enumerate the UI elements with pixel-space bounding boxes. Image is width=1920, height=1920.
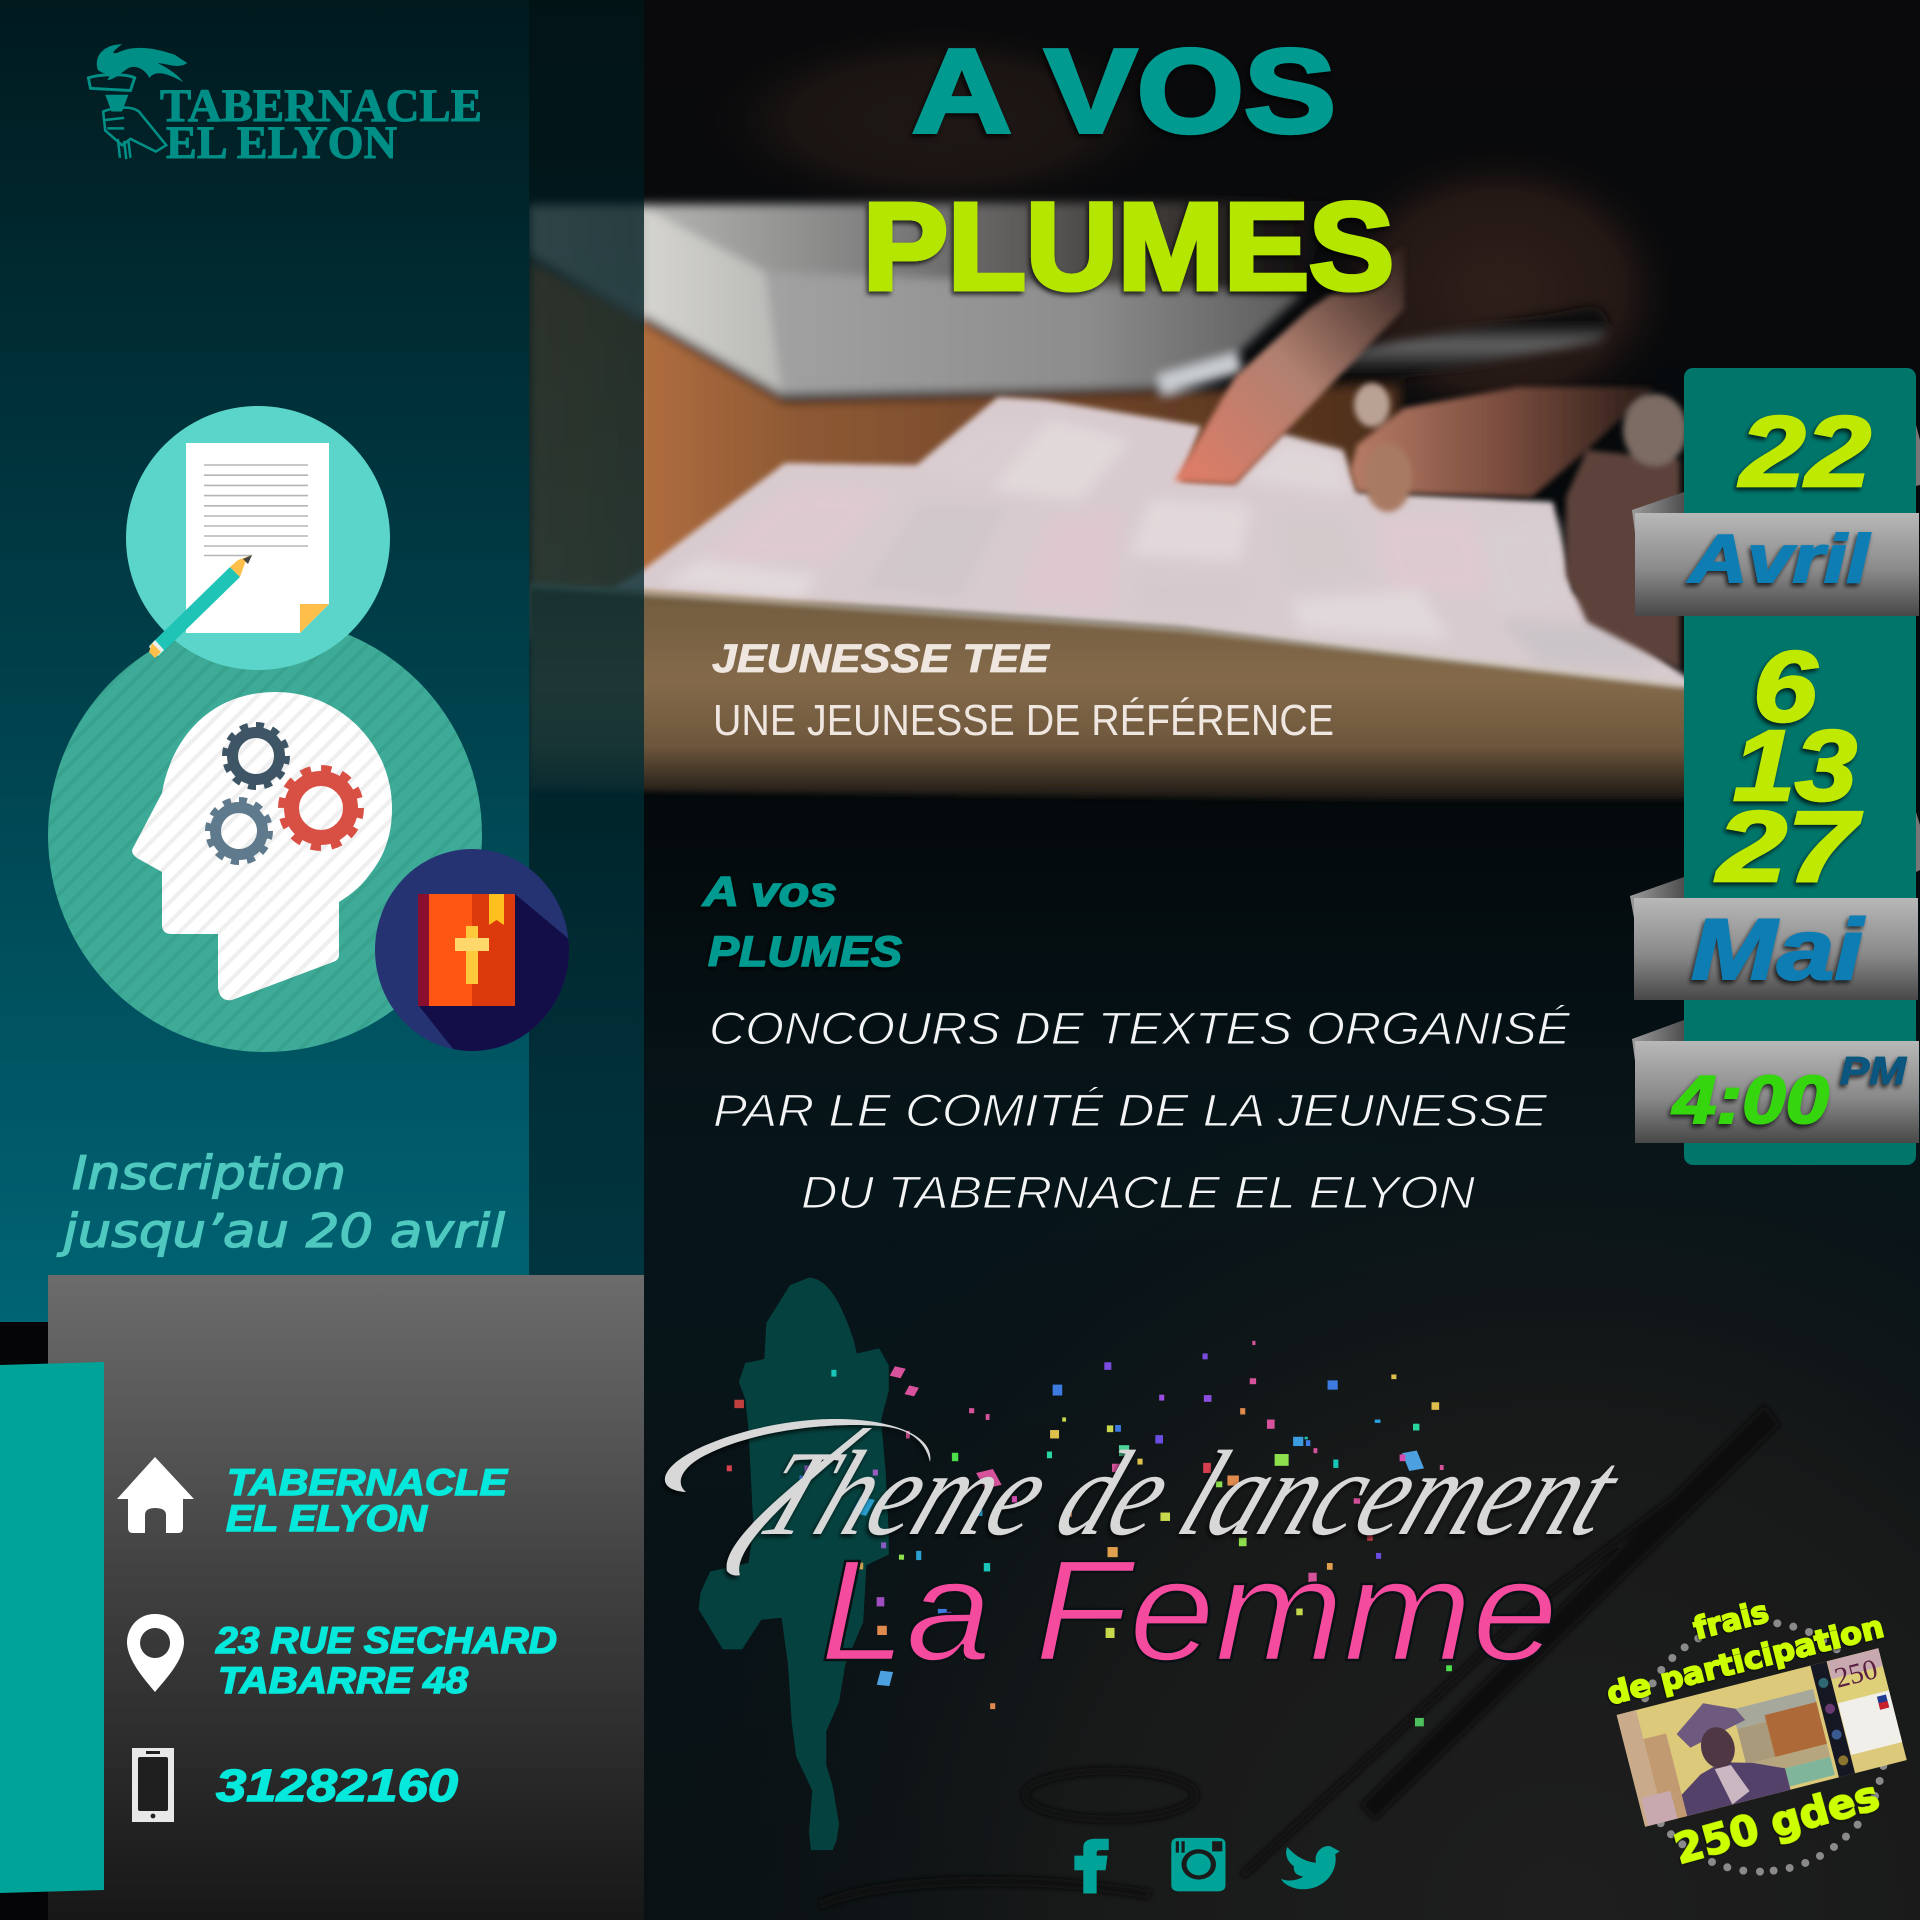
logo text: TABERNACLE (160, 80, 482, 132)
social icons (1074, 1838, 1340, 1893)
pointing finger (1174, 246, 1404, 484)
description lines: DU TABERNACLE EL ELYON (801, 1167, 1476, 1218)
gear dark (225, 725, 287, 787)
text: event description (702, 868, 1571, 1218)
book pages (529, 397, 1690, 695)
time (1671, 1050, 1908, 1138)
big green circle (48, 618, 482, 1052)
pen (1160, 362, 1240, 385)
sheets of paper (529, 196, 1308, 324)
panel: contact block (0, 1275, 644, 1920)
text: Jeunesse TEE slogan: JEUNESSE TEE (712, 637, 1050, 681)
dotted ring (1641, 1619, 1887, 1876)
date numbers: 13 (1733, 710, 1857, 822)
faint hand in shadow (758, 48, 1655, 400)
pencil (149, 555, 252, 658)
date numbers: 22 (1738, 396, 1871, 508)
description lines: PAR LE COMITÉ DE LA JEUNESSE (713, 1085, 1548, 1136)
contact: name: TABERNACLE (227, 1462, 508, 1503)
date numbers (1714, 396, 1871, 903)
icon: head with gears (48, 618, 482, 1052)
icon: location pin (127, 1614, 184, 1692)
gear red (282, 769, 360, 847)
fee text: 250 gdes (1669, 1771, 1884, 1874)
heading: La Femme: La Femme (820, 1530, 1558, 1691)
heading: Theme de lancement: Theme de lancement (741, 1426, 1640, 1561)
confetti (727, 1341, 1452, 1726)
month labels (1687, 521, 1871, 998)
panel: dates (1630, 368, 1920, 1165)
time: PM (1840, 1050, 1908, 1093)
text: inscription deadline: Inscription (72, 1146, 346, 1200)
icon: torch (88, 44, 187, 159)
table (529, 260, 1400, 620)
icon: instagram (1171, 1838, 1226, 1891)
text: Jeunesse TEE slogan: UNE JEUNESSE DE RÉFÉRENCE (713, 696, 1334, 745)
contact: address: 23 RUE SECHARD (215, 1620, 557, 1661)
left panel: upper teal gradient (0, 0, 644, 1322)
banknote value: 250 (1831, 1653, 1881, 1695)
head silhouette (132, 692, 392, 1000)
photo: hand pointing at bible (529, 20, 1690, 800)
gear slate (208, 800, 270, 862)
title: A vos plumes (863, 25, 1394, 316)
contact: address (215, 1620, 557, 1701)
paper sheet (186, 443, 329, 633)
contact: name (226, 1462, 508, 1539)
book edge (529, 585, 1690, 800)
banknote (1617, 1648, 1907, 1827)
logo: Tabernacle El Elyon (88, 44, 482, 169)
month labels: Avril (1687, 521, 1871, 597)
fee text: frais (1690, 1595, 1772, 1647)
subheading (702, 868, 902, 976)
subheading: A vos (702, 868, 837, 915)
fee text: de participation (1603, 1610, 1887, 1712)
date numbers: 6 (1753, 631, 1819, 743)
page text blocks (660, 420, 1660, 670)
description lines: CONCOURS DE TEXTES ORGANISÉ (709, 1003, 1571, 1054)
curled fingers (1350, 387, 1654, 497)
heading: Theme de lancement (665, 1419, 1640, 1576)
writing lines (204, 465, 308, 556)
contact: phone number: 31282160 (216, 1760, 458, 1811)
text: Jeunesse TEE slogan (712, 637, 1334, 745)
contact: address: TABARRE 48 (218, 1660, 468, 1701)
icon: twitter (1281, 1846, 1340, 1889)
contact: name: EL ELYON (226, 1498, 428, 1539)
icon: phone (132, 1748, 174, 1822)
logo: Tabernacle El Elyon: EL ELYON (166, 117, 397, 169)
badge: participation fee (1603, 1595, 1907, 1876)
icon: bible circle (375, 849, 569, 1051)
icon: home (117, 1457, 194, 1533)
title: A vos plumes: PLUMES (863, 179, 1394, 316)
fee text (1603, 1595, 1887, 1874)
text: inscription deadline (56, 1146, 505, 1258)
time: 4:00 (1671, 1062, 1829, 1138)
ribbons (1635, 513, 1919, 616)
icon: facebook (1074, 1839, 1109, 1893)
icon: document and pencil (126, 406, 390, 670)
subheading: PLUMES (708, 928, 902, 976)
title: A vos plumes: A VOS (912, 25, 1336, 158)
silhouette: woman (699, 1278, 889, 1850)
month labels: Mai (1691, 902, 1866, 998)
side folds (1632, 492, 1684, 533)
date numbers: 27 (1714, 791, 1863, 903)
description lines (709, 1003, 1571, 1218)
text: inscription deadline: jusqu’au 20 avril (56, 1204, 505, 1258)
